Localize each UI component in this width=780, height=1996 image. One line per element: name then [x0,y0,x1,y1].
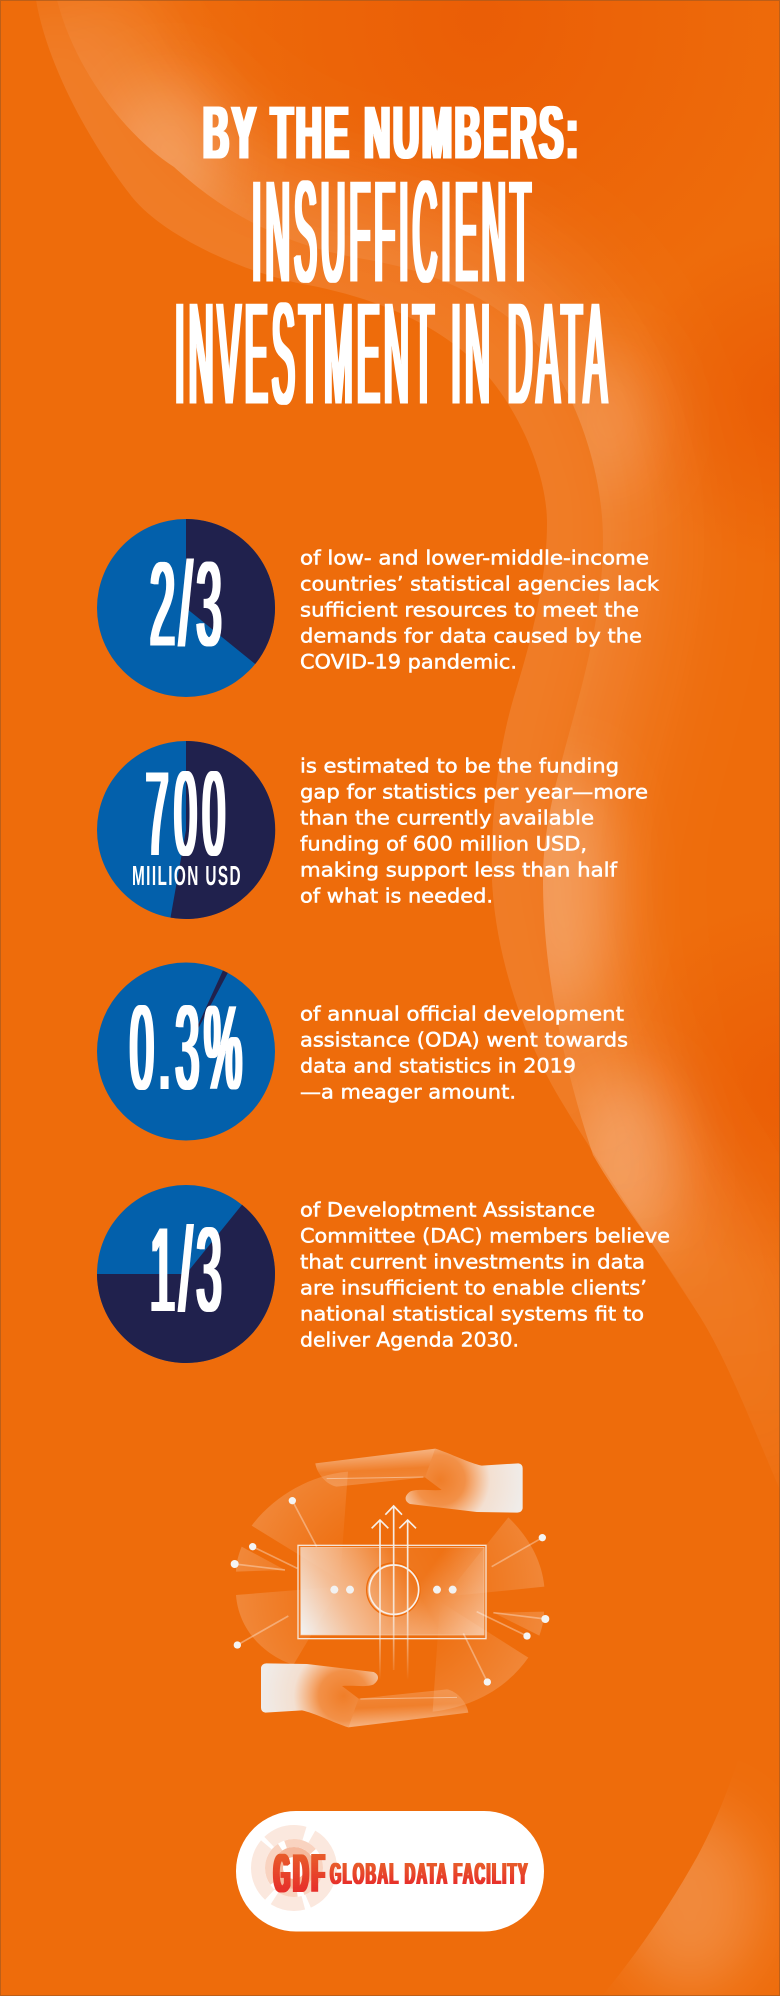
stat panel: 1/3: 1/3 [150,1203,226,1337]
bottom hand [261,1663,468,1727]
stat text: statistical agencies [300,546,660,673]
logo: Global Data Facility: GDF [274,1842,328,1904]
stat text: statistical agencies: sufficient resources to meet the [300,598,639,621]
stat panel: 2/3: 2/3 [150,538,226,672]
stat text: funding gap: of what is needed. [300,885,493,908]
rising arrows [372,1506,416,1680]
stat text: funding gap: funding of 600 million USD, [300,833,587,856]
stat unit: million USD: MIILION USD [132,860,242,891]
pie chart: one third [97,1185,275,1363]
stat text: official development assistance: assistance (ODA) went towards [300,1029,628,1052]
pie chart: two thirds [97,519,275,697]
stat text: official development assistance [300,1003,628,1104]
stat text: statistical agencies: countries’ statistical agencies lack [300,572,660,595]
pie chart: funding gap [97,741,275,919]
illustration: hands around banknote [231,1449,549,1727]
title [175,92,611,434]
stat panel: 700 million USD [97,741,648,919]
stat text: DAC members: national statistical systems fit to [300,1303,644,1326]
stat text: official development assistance: —a meager amount. [300,1081,516,1104]
banknote [298,1545,486,1639]
stat text: DAC members: deliver Agenda 2030. [300,1329,519,1352]
logo emblem [258,1832,330,1904]
background wave: inner ribbon [58,1,722,1278]
stat text: DAC members: Committee (DAC) members believe [300,1225,670,1248]
stat panel: 1/3 [97,1185,670,1363]
stat text: DAC members: are insufficient to enable clients’ [300,1277,647,1300]
stat panel: 700 million USD: 700 [146,747,231,881]
stat text: official development assistance: data and statistics in 2019 [300,1055,576,1078]
pie chart: sliver [97,962,275,1140]
stat panel: 2/3 [97,519,660,697]
background wave: outer ribbon [36,0,780,1490]
logo: Global Data Facility: GLOBAL DATA FACILITY [330,1857,529,1891]
stat text: official development assistance: of annual official development [300,1003,624,1026]
stat text: funding gap: than the currently available [300,807,594,830]
stat text: funding gap: gap for statistics per year—more [300,781,648,804]
stat text: DAC members [300,1199,670,1352]
stat text: DAC members: that current investments in data [300,1251,645,1274]
stat text: funding gap: making support less than half [300,859,618,882]
stat text: statistical agencies: demands for data caused by the [300,624,642,647]
stat text: statistical agencies: of low- and lower-middle-income [300,546,649,569]
stat text: statistical agencies: COVID-19 pandemic. [300,650,517,673]
top hand [315,1449,523,1513]
stat text: funding gap: is estimated to be the funding [300,755,619,778]
stat text: funding gap [300,755,648,908]
stat panel: 0.3% [97,962,628,1140]
logo: Global Data Facility [236,1811,544,1932]
stat panel: 0.3%: 0.3% [130,981,247,1115]
connector lines and dots [231,1497,549,1686]
logo pill [236,1811,544,1932]
background wave: lower right [620,1810,760,1990]
stat text: DAC members: of Developtment Assistance [300,1199,595,1222]
radial sectors [236,1472,544,1712]
